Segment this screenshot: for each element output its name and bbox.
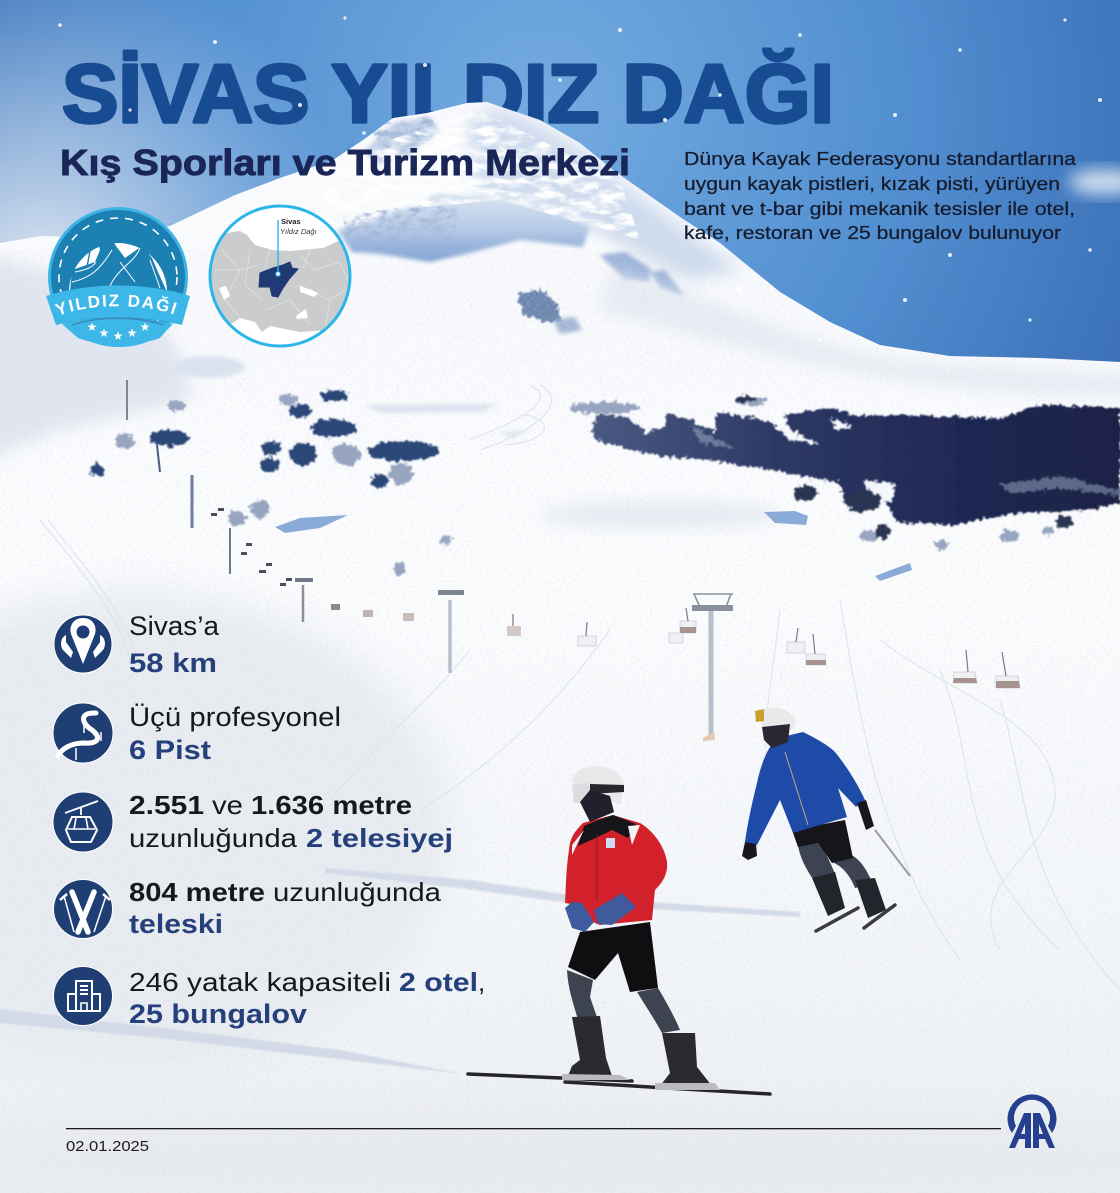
map: land — [212, 231, 348, 332]
back skier in blue jacket — [742, 707, 910, 931]
badge: white sky disc — [69, 243, 167, 292]
peak lower shaded face — [337, 192, 590, 262]
snow grain texture — [0, 250, 1120, 1193]
fact: chairlifts — [53, 790, 453, 853]
front skier shorts — [568, 922, 658, 992]
icon: winding piste — [53, 703, 113, 763]
back skier legs — [798, 843, 873, 888]
badge: Yıldız Dağı logo — [46, 207, 190, 347]
fact: chairlifts: 1.636 metre — [251, 790, 412, 820]
front skier gloves — [565, 893, 636, 932]
snowflakes — [58, 16, 1102, 342]
front skier jacket — [565, 815, 667, 925]
badge: stars: ★ — [99, 326, 109, 340]
chairs — [211, 508, 1020, 688]
icon: cable car — [53, 792, 113, 852]
fact: distance: 58 km — [129, 648, 217, 678]
trees: left and scattered groups — [90, 390, 439, 488]
locator map: Sivas — [281, 217, 301, 226]
description text: Dünya Kayak Federasyonu standartlarına — [684, 149, 1077, 169]
rock dapple — [343, 115, 460, 242]
long skier shadows — [325, 868, 800, 917]
fact: lodging: , — [478, 967, 485, 997]
fact: lodging: 25 bungalov — [129, 999, 307, 1029]
back skier gloves and pole — [742, 800, 874, 860]
fact: chairlifts: 2 telesiyej — [306, 823, 453, 853]
badge: lower band — [46, 286, 190, 325]
badge: stars — [87, 320, 150, 343]
badge: stars: ★ — [113, 329, 123, 343]
ski tracks — [40, 385, 1120, 990]
subtitle: Kış Sporları ve Turizm Merkezi — [60, 142, 630, 183]
fact: chairlifts: ve — [212, 790, 243, 820]
fact: t-bar lift — [54, 877, 442, 939]
description text: uygun kayak pistleri, kızak pisti, yürüyen — [684, 174, 1060, 194]
fact: pistes: 6 Pist — [129, 735, 211, 765]
icon: hotel building — [54, 966, 112, 1026]
fact: distance — [54, 611, 220, 678]
description text — [684, 149, 1077, 243]
back skier shorts — [792, 820, 853, 863]
locator map — [200, 206, 360, 346]
chairlift towers and chairs — [127, 380, 1020, 741]
icon: location pins — [54, 615, 112, 673]
badge: stars: ★ — [87, 320, 97, 334]
badge: stars: ★ — [127, 326, 137, 340]
fact: lodging: 2 otel — [399, 967, 478, 997]
description text: bant ve t-bar gibi mekanik tesisler ile otel, — [684, 199, 1075, 219]
badge: mountains and skier — [70, 236, 167, 292]
badge: stars: ★ — [140, 320, 150, 334]
front skier head — [572, 766, 624, 805]
fact: chairlifts: 2.551 — [129, 790, 204, 820]
locator map: Yıldız Dağı — [280, 227, 317, 236]
description text: kafe, restoran ve 25 bungalov bulunuyor — [684, 223, 1061, 243]
fact: chairlifts: uzunluğunda — [129, 823, 298, 853]
fact: distance: Sivas’a — [129, 611, 220, 641]
icon: skis and poles — [54, 880, 112, 938]
front skier skis — [468, 1074, 770, 1094]
fact: lodging — [54, 966, 485, 1029]
fact: pistes: Üçü profesyonel — [129, 702, 341, 732]
fact: pistes — [53, 702, 341, 765]
back skier boots and skis — [812, 872, 886, 918]
peak upper face — [470, 108, 740, 280]
title: SİVAS YILDIZ DAĞI — [62, 47, 834, 140]
back skier head — [758, 707, 796, 730]
front skier boots — [568, 1016, 712, 1086]
shaded pools — [275, 511, 912, 581]
tree clusters — [90, 390, 1120, 576]
fact: lodging: 246 yatak kapasiteli — [129, 967, 391, 997]
front skier in red jacket — [468, 766, 770, 1094]
map: Sivas province — [259, 262, 298, 297]
front skier legs — [567, 970, 680, 1033]
badge: name on ribbon: YILDIZ DAĞI — [54, 294, 177, 314]
footer line and date: 02.01.2025 — [66, 1138, 149, 1155]
logo: Anadolu Agency — [1008, 1094, 1056, 1148]
fact: t-bar lift: uzunluğunda — [273, 877, 442, 907]
background: winter sky — [0, 0, 1120, 420]
trees: right forest band — [590, 405, 1120, 525]
fact: t-bar lift: 804 metre — [129, 877, 265, 907]
back skier jacket — [745, 732, 865, 845]
fact: t-bar lift: teleski — [129, 909, 223, 939]
